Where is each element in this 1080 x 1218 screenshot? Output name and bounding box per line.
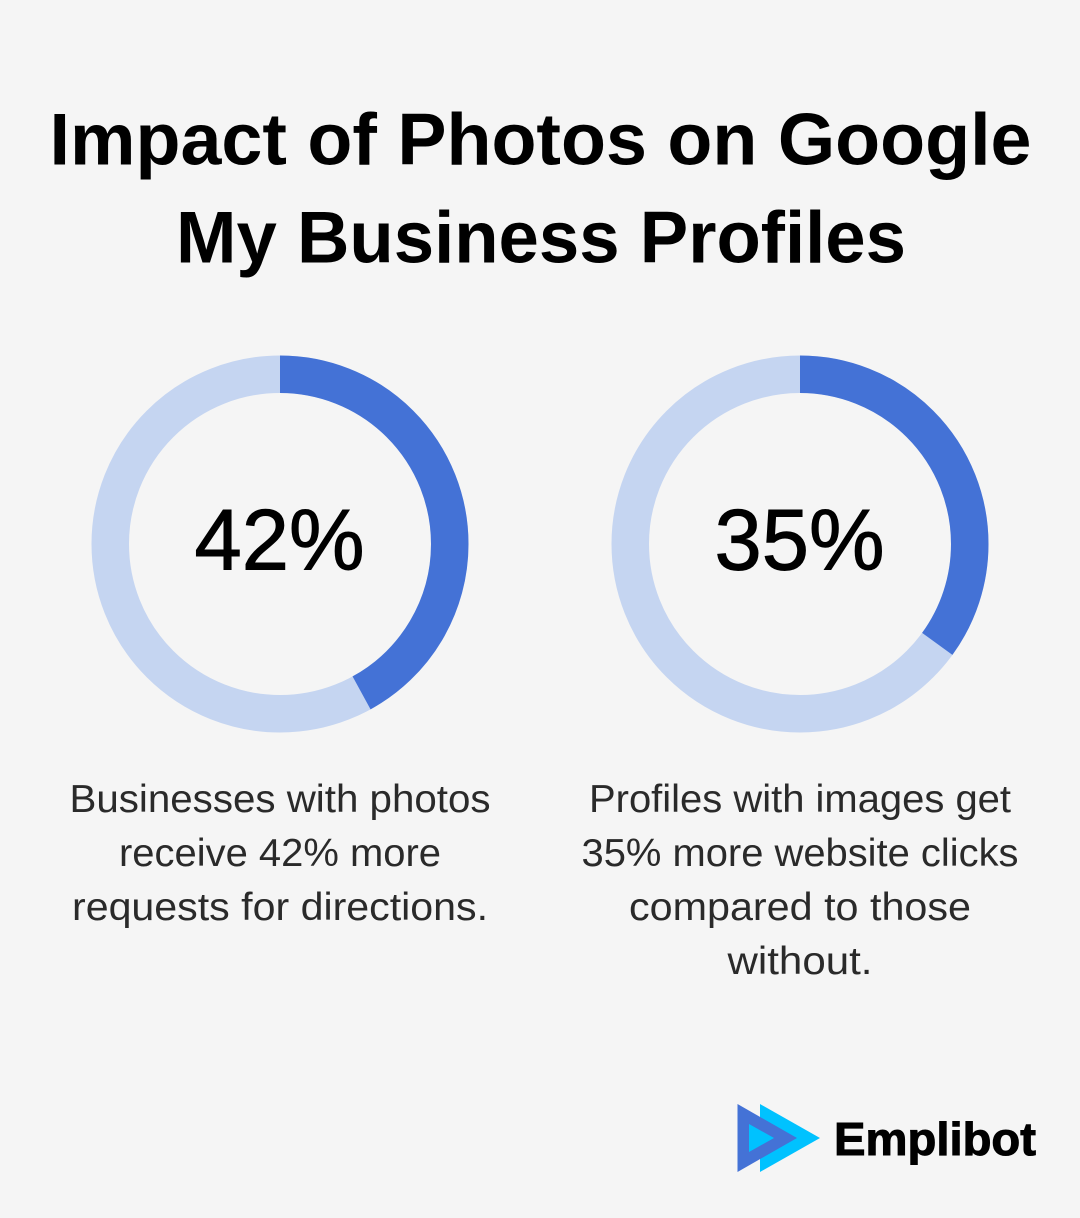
title: Impact of Photos on Google: [50, 100, 1032, 180]
panel: 42% stat: [70, 374, 490, 929]
value: 35%: 35%: [714, 492, 884, 588]
title: [50, 100, 1032, 278]
description: 35%: compared to those: [629, 886, 971, 929]
logo: Emplibot: [738, 1104, 1036, 1172]
description: 42%: requests for directions.: [72, 886, 488, 929]
donut chart: 35%: [630, 374, 970, 714]
wordmark: Emplibot: [834, 1113, 1036, 1165]
description: 42%: receive 42% more: [119, 832, 441, 875]
donut chart: 42%: [110, 374, 450, 714]
icon: play triangles: [738, 1104, 820, 1172]
description: 35%: [582, 778, 1018, 983]
description: 35%: 35% more website clicks: [582, 832, 1018, 875]
description: 35%: without.: [726, 940, 872, 983]
value: 42%: 42%: [194, 492, 364, 588]
title: My Business Profiles: [176, 198, 906, 278]
description: 42%: Businesses with photos: [70, 778, 490, 821]
description: 35%: Profiles with images get: [589, 778, 1011, 821]
description: 42%: [70, 778, 490, 929]
panel: 35% stat: [582, 374, 1018, 983]
